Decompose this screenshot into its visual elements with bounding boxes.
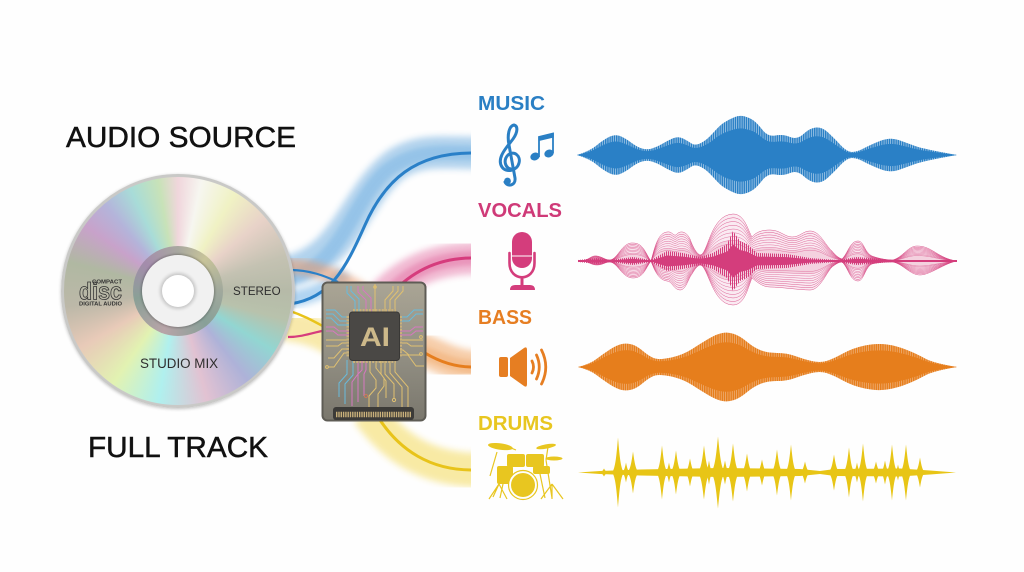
line: yellow left	[292, 310, 322, 327]
heading: audio source: AUDIO SOURCE	[66, 122, 296, 154]
band: blue upper	[285, 152, 480, 272]
band: blue lower	[285, 272, 345, 300]
icon: drum kit	[488, 442, 563, 500]
chip body	[322, 282, 426, 420]
disc hole rim	[162, 275, 194, 307]
icon: speaker	[499, 347, 546, 387]
waveform: bass	[577, 331, 957, 403]
compact disc logo: COMPACT	[92, 280, 122, 286]
label: vocals: VOCALS	[478, 200, 562, 222]
line: pink left	[288, 330, 322, 338]
disc inner ring	[133, 246, 223, 336]
line: blue main	[290, 153, 472, 304]
waveform: drums	[578, 436, 956, 508]
compact disc logo: DIGITAL AUDIO	[79, 302, 122, 308]
chip AI text: AI	[360, 322, 390, 352]
band: blue upper core	[285, 153, 480, 278]
disc label: stereo: STEREO	[233, 285, 281, 298]
band: orange right	[400, 343, 480, 367]
band: pink right core	[389, 250, 471, 282]
line: yellow right	[380, 420, 472, 470]
line: orange right	[425, 353, 472, 367]
disc hub	[142, 255, 214, 327]
waveform: music	[577, 113, 957, 197]
ribbons: connections between disc, chip and stems	[283, 132, 471, 488]
band: yellow right	[368, 412, 480, 470]
chip traces	[326, 284, 424, 407]
heading: full track: FULL TRACK	[88, 432, 269, 464]
compact disc logo: disc	[79, 278, 122, 305]
icon: treble clef and notes	[500, 125, 555, 185]
band: salmon left	[285, 266, 365, 292]
label: drums: DRUMS	[478, 413, 553, 435]
label: bass: BASS	[478, 307, 532, 329]
disc label: studio mix: STUDIO MIX	[140, 356, 218, 371]
band: pink right	[375, 258, 480, 305]
icon: microphone	[510, 232, 535, 290]
band: orange right core	[410, 348, 480, 367]
line: blue branch	[290, 270, 338, 282]
label: music: MUSIC	[478, 93, 545, 115]
waveforms	[577, 116, 957, 508]
disc: compact disc	[61, 174, 295, 408]
line: pink right	[402, 256, 471, 282]
chip die	[350, 312, 400, 360]
chip connector	[333, 407, 414, 420]
chip pads	[348, 310, 400, 362]
band: pale yellow left	[283, 318, 322, 356]
waveform: vocals	[578, 214, 958, 305]
